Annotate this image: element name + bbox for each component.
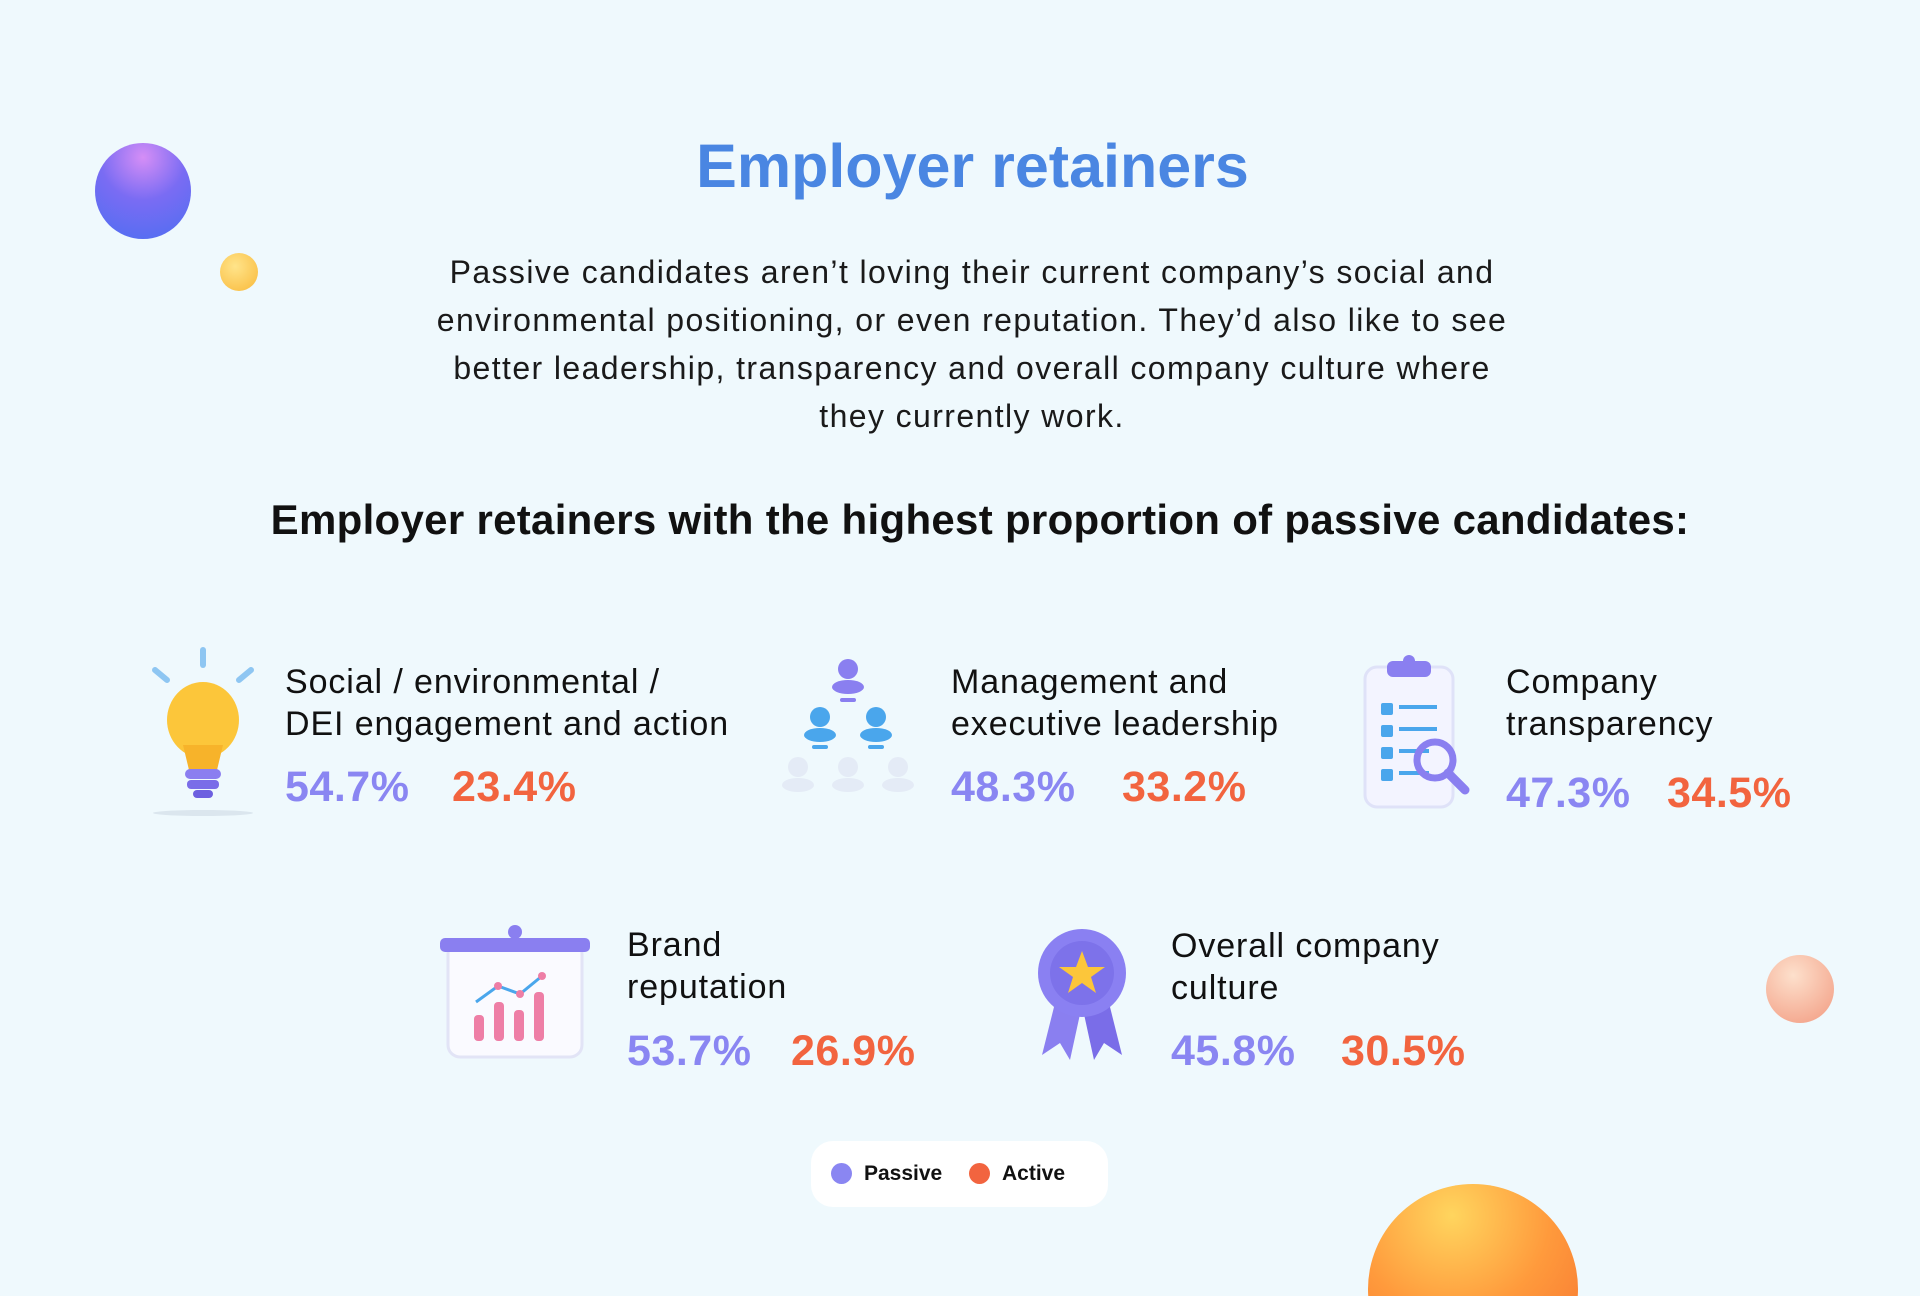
active value: 33.2%	[1122, 763, 1246, 811]
decor: orange sphere	[1368, 1184, 1578, 1296]
intro paragraph: Passive candidates aren’t loving their current company’s social and environmental positioning, or even reputation. They’d also like to see better leadership, transparency and overall company culture where they currently work.	[437, 254, 1507, 434]
label: Overall company	[1171, 927, 1440, 965]
decor: yellow sphere	[220, 253, 258, 291]
legend	[811, 1141, 1108, 1207]
label: executive leadership	[951, 705, 1279, 743]
active value: 23.4%	[452, 763, 576, 811]
label	[951, 663, 1279, 743]
decor: purple sphere	[95, 143, 191, 239]
label: Management and	[951, 663, 1228, 701]
icon: award ribbon	[1038, 929, 1126, 1060]
decor: peach sphere	[1766, 955, 1834, 1023]
icon: people hierarchy	[782, 659, 914, 792]
label	[1506, 663, 1713, 743]
label: Brand	[627, 926, 722, 964]
label: DEI engagement and action	[285, 705, 729, 743]
item: transparency	[1364, 655, 1791, 817]
label: transparency	[1506, 705, 1713, 743]
passive value: 45.8%	[1171, 1027, 1295, 1075]
legend: passive: Passive	[864, 1162, 942, 1185]
label: culture	[1171, 969, 1279, 1007]
active value: 30.5%	[1341, 1027, 1465, 1075]
active value: 26.9%	[791, 1027, 915, 1075]
item: brand	[440, 925, 915, 1075]
passive value: 53.7%	[627, 1027, 751, 1075]
label	[285, 663, 729, 743]
icon: lightbulb	[152, 647, 254, 816]
icon: chart board	[440, 925, 590, 1058]
passive value: 54.7%	[285, 763, 409, 811]
title: Employer retainers	[696, 132, 1249, 200]
passive value: 48.3%	[951, 763, 1075, 811]
item: management	[782, 659, 1279, 811]
label	[627, 926, 787, 1006]
item: culture	[1038, 927, 1465, 1075]
label	[1171, 927, 1440, 1007]
label: reputation	[627, 968, 787, 1006]
passive value: 47.3%	[1506, 769, 1630, 817]
legend: active	[969, 1162, 1065, 1185]
label: Company	[1506, 663, 1658, 701]
subheading: Employer retainers with the highest proportion of passive candidates:	[271, 496, 1689, 543]
legend: active: Active	[1002, 1162, 1065, 1185]
active value: 34.5%	[1667, 769, 1791, 817]
item: social	[152, 647, 729, 816]
icon: clipboard	[1364, 655, 1470, 808]
label: Social / environmental /	[285, 663, 660, 701]
